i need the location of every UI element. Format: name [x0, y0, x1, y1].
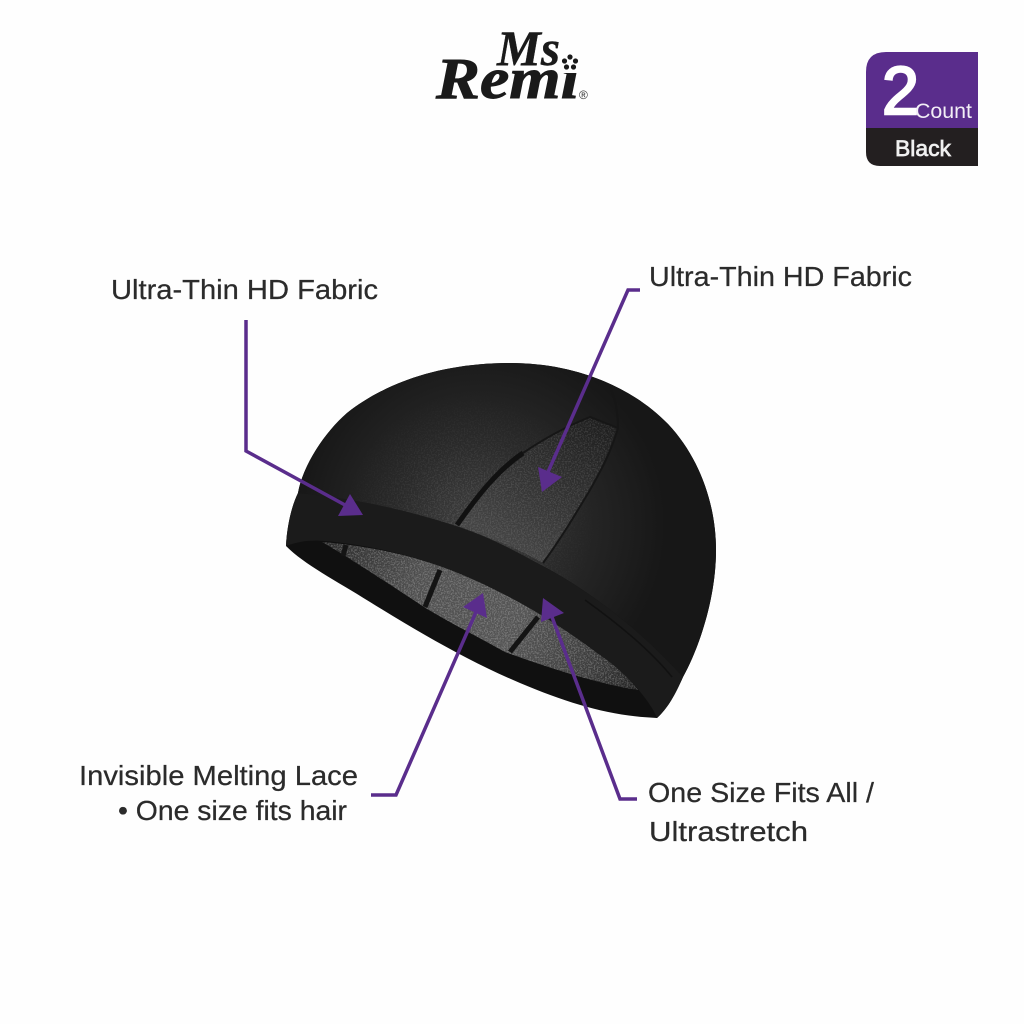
inner seams [343, 545, 538, 652]
panel seams [523, 387, 618, 563]
cap inner mesh [322, 542, 638, 690]
cap dome [298, 363, 716, 677]
arrow: right fabric [538, 290, 640, 492]
label: One Size Fits All / Ultrastretch: Ultrastretch [649, 816, 808, 847]
cap band [286, 493, 683, 718]
arrow: left fabric [246, 320, 363, 516]
badge: 2 Count Black: 2 [882, 53, 919, 129]
label: One Size Fits All / Ultrastretch [648, 777, 874, 847]
badge: 2 Count Black: Black [895, 136, 952, 161]
wig cap [286, 363, 716, 718]
label: right Ultra-Thin HD Fabric: Ultra-Thin HD Fabric [649, 261, 912, 292]
label: Invisible Melting Lace: • One size fits hair [118, 795, 347, 826]
badge: 2 Count Black [866, 52, 978, 166]
logo: Ms Remi: Ms [496, 20, 560, 76]
dome texture [380, 429, 546, 566]
label: Invisible Melting Lace: Invisible Melting Lace [79, 760, 358, 791]
back panel [455, 417, 618, 563]
cap silhouette base [286, 363, 716, 718]
label: Invisible Melting Lace [79, 760, 358, 826]
logo: Ms Remi: Remi [435, 46, 579, 111]
band crease [585, 600, 672, 677]
logo flower [560, 52, 582, 73]
badge: 2 Count Black: Count [915, 100, 972, 123]
arrow: invisible melting lace [371, 593, 487, 795]
label: left Ultra-Thin HD Fabric: Ultra-Thin HD Fabric [111, 274, 378, 305]
logo: Ms Remi [435, 20, 588, 111]
logo: Ms Remi: ® [579, 88, 588, 102]
label: One Size Fits All / Ultrastretch: One Size Fits All / [648, 777, 874, 808]
arrow: one size fits all [541, 598, 637, 799]
